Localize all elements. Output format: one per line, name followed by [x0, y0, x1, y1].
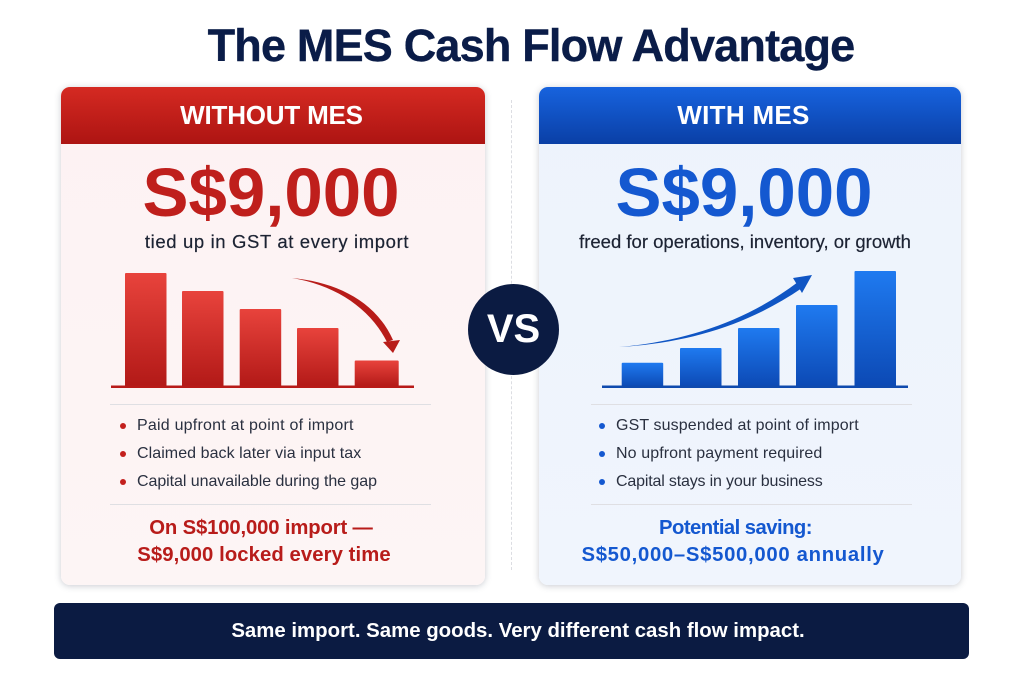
chart: declining bars [111, 273, 414, 388]
subtitle: with MES: freed for operations, inventory, or growth [579, 231, 911, 252]
chart: rising bars [602, 271, 908, 388]
note: with MES: Potential saving: [659, 516, 812, 538]
title: The MES Cash Flow Advantage [208, 20, 854, 71]
bullet list: with MES: Capital stays in your business [616, 473, 823, 490]
note: without MES [137, 516, 391, 566]
VS badge [468, 284, 559, 375]
bullet list: with MES: GST suspended at point of import [616, 417, 859, 434]
heading: with MES: WITH MES [677, 100, 810, 130]
note: without MES: On S$100,000 import — [149, 516, 373, 538]
heading: without MES [61, 87, 485, 144]
bullet list: without MES [120, 417, 377, 490]
bullet list: without MES: Capital unavailable during the gap [137, 473, 377, 490]
panel: without MES [61, 87, 485, 585]
panel: with MES [539, 87, 961, 585]
note: without MES: S$9,000 locked every time [137, 544, 391, 566]
amount: without MES: S$9,000 [142, 154, 400, 231]
subtitle: without MES: tied up in GST at every import [145, 231, 409, 252]
note: with MES: S$50,000–S$500,000 annually [581, 544, 885, 566]
bullet list: with MES [599, 417, 859, 490]
bottom banner [54, 603, 969, 659]
heading: without MES: WITHOUT MES [180, 100, 363, 130]
amount: with MES: S$9,000 [615, 154, 873, 231]
bullet list: with MES: No upfront payment required [616, 445, 822, 462]
bottom banner: Same import. Same goods. Very different cash flow impact. [231, 620, 805, 642]
VS badge: VS [487, 307, 540, 351]
heading: with MES [539, 87, 961, 144]
note: with MES [581, 516, 885, 566]
bullet list: without MES: Claimed back later via input tax [137, 445, 361, 462]
bullet list: without MES: Paid upfront at point of import [137, 417, 354, 434]
